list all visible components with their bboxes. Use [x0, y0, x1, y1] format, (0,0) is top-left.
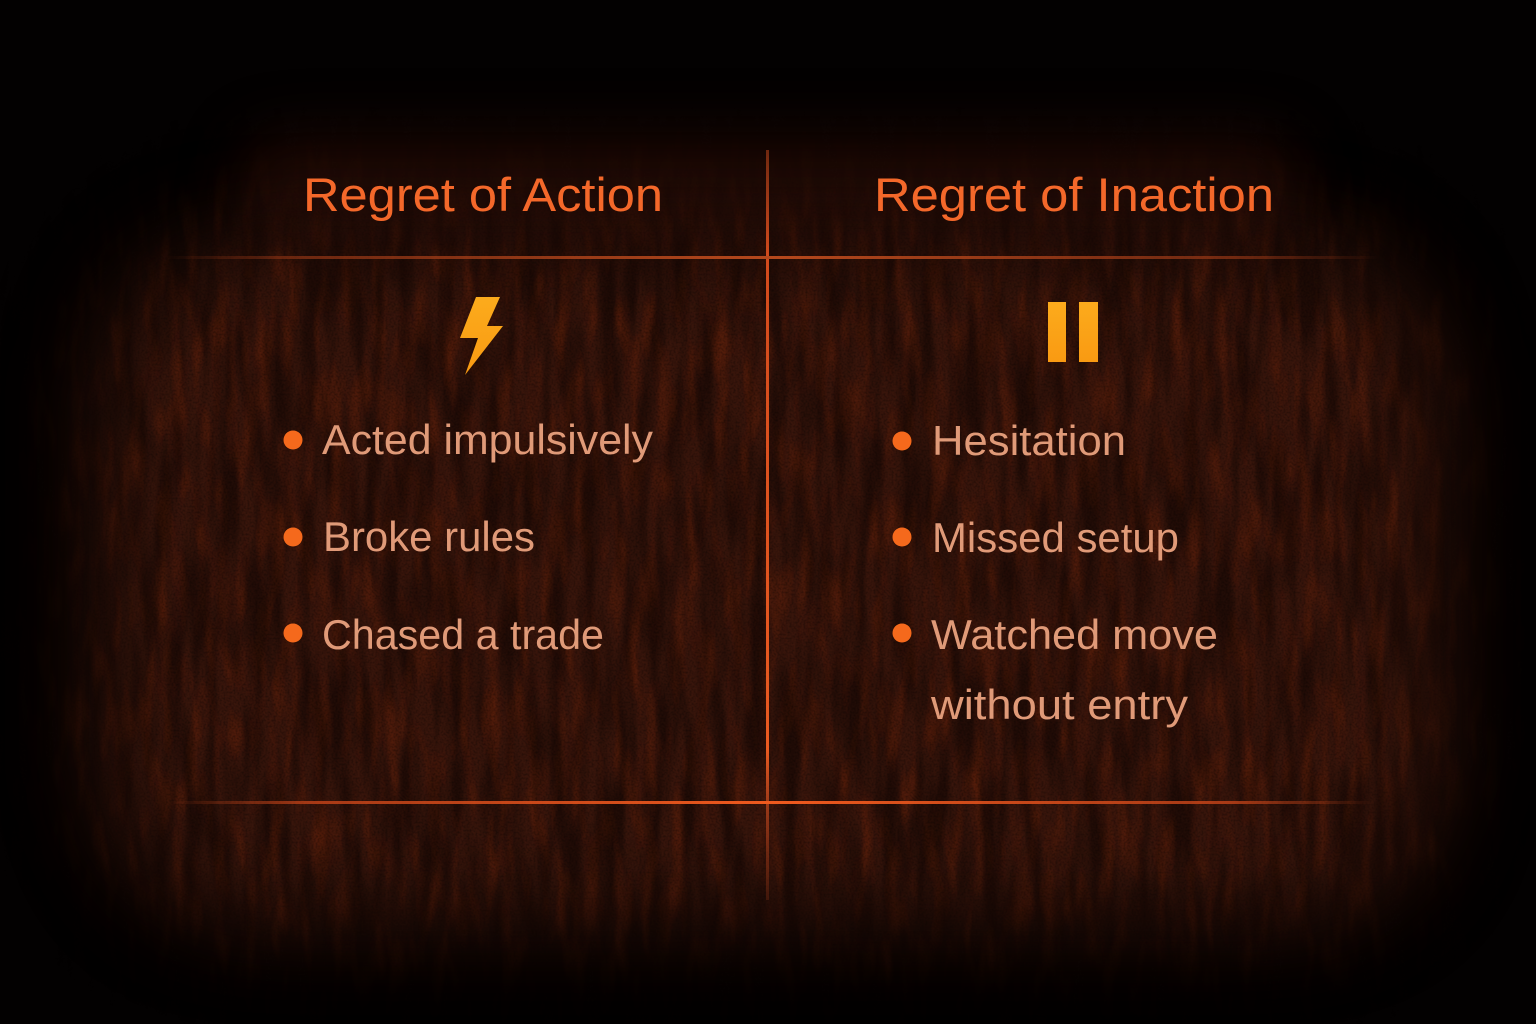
- list: inaction bullets: [892, 417, 1218, 728]
- bullet: missed setup: Missed setup: [932, 514, 1179, 561]
- bullet: watched move without entry: without entry: [930, 681, 1188, 728]
- bullet: watched move without entry: Watched move: [931, 611, 1218, 658]
- bullet: watched move without entry: [892, 611, 1218, 728]
- bullet: broke rules: Broke rules: [323, 513, 535, 560]
- background: dark vignette with ember glow: [46, 126, 1492, 978]
- vertical divider: [766, 150, 769, 900]
- bullet: chased a trade: Chased a trade: [322, 611, 604, 658]
- heading: regret of action: Regret of Action: [303, 168, 663, 221]
- panel: regret of inaction: [874, 168, 1274, 728]
- bottom rule: [170, 801, 1375, 804]
- bullet: acted impulsively: Acted impulsively: [322, 416, 653, 463]
- icon: lightning bolt: [460, 297, 503, 375]
- heading: regret of inaction: Regret of Inaction: [874, 168, 1274, 221]
- header rule: [165, 256, 1380, 259]
- panel: regret of action: [284, 168, 663, 658]
- bullet: hesitation: Hesitation: [932, 417, 1126, 464]
- list: action bullets: [284, 416, 653, 658]
- icon: pause: [1048, 302, 1098, 362]
